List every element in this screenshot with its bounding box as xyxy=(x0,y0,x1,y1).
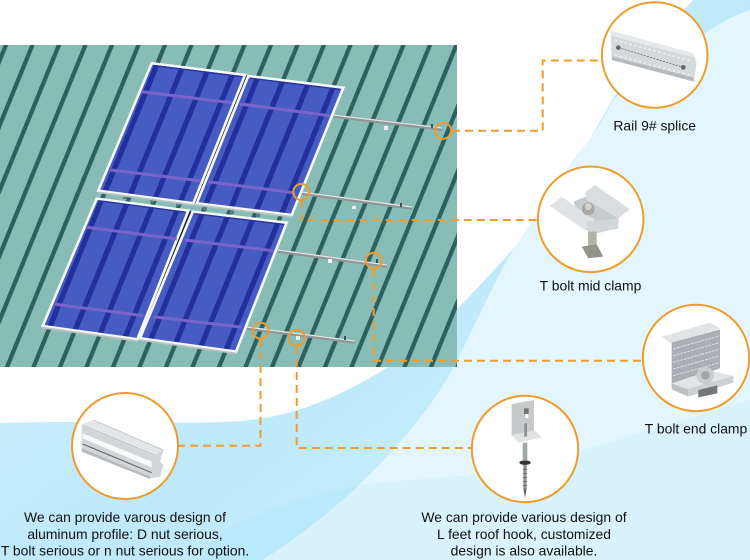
rail stubs between panel rows xyxy=(125,194,258,217)
dashed connector: roof hook xyxy=(297,346,472,448)
callout: rail splice xyxy=(602,2,708,134)
callout: L feet roof hook xyxy=(421,396,627,558)
icon: hook bolt xyxy=(512,400,542,498)
panel: top left xyxy=(98,63,245,203)
label: We can provide various design of xyxy=(421,509,627,525)
purple rails seen through glass xyxy=(55,92,330,327)
small marker circles xyxy=(253,123,451,346)
panel: top right xyxy=(197,76,343,215)
panel gap shadow xyxy=(139,76,246,339)
panel lower frame shading xyxy=(43,192,292,353)
callout: T bolt mid clamp xyxy=(538,166,644,294)
icon: splice bar xyxy=(611,31,697,82)
label: T bolt serious or n nut serious for option. xyxy=(1,542,249,558)
label: L feet roof hook, customized xyxy=(437,526,611,542)
mounting rails extending past the panels xyxy=(247,115,442,342)
panel: bottom left xyxy=(43,199,188,339)
dashed connector: rail splice xyxy=(452,60,602,131)
label: design is also available. xyxy=(451,542,597,558)
callout: T bolt end clamp xyxy=(643,305,749,436)
callout: aluminum profile xyxy=(1,393,249,558)
dashed connector: aluminum profile xyxy=(178,339,260,446)
label xyxy=(1,509,249,558)
panel: bottom right xyxy=(140,212,287,352)
label: aluminum profile: D nut serious, xyxy=(27,526,223,542)
inner dark top edge of glass xyxy=(98,66,340,224)
icon: end clamp xyxy=(662,323,733,397)
dashed connector: end clamp xyxy=(374,269,643,361)
label: Rail 9# splice xyxy=(613,118,696,134)
dashed connector: mid clamp xyxy=(302,200,537,220)
icon: rail profile xyxy=(82,420,163,479)
icon: mid clamp xyxy=(550,185,630,258)
label xyxy=(421,509,627,558)
label: T bolt end clamp xyxy=(645,420,747,436)
roof with standing seams xyxy=(0,45,457,367)
label: We can provide varous design of xyxy=(24,509,226,525)
solar panel array xyxy=(43,63,343,353)
label: T bolt mid clamp xyxy=(540,278,642,294)
